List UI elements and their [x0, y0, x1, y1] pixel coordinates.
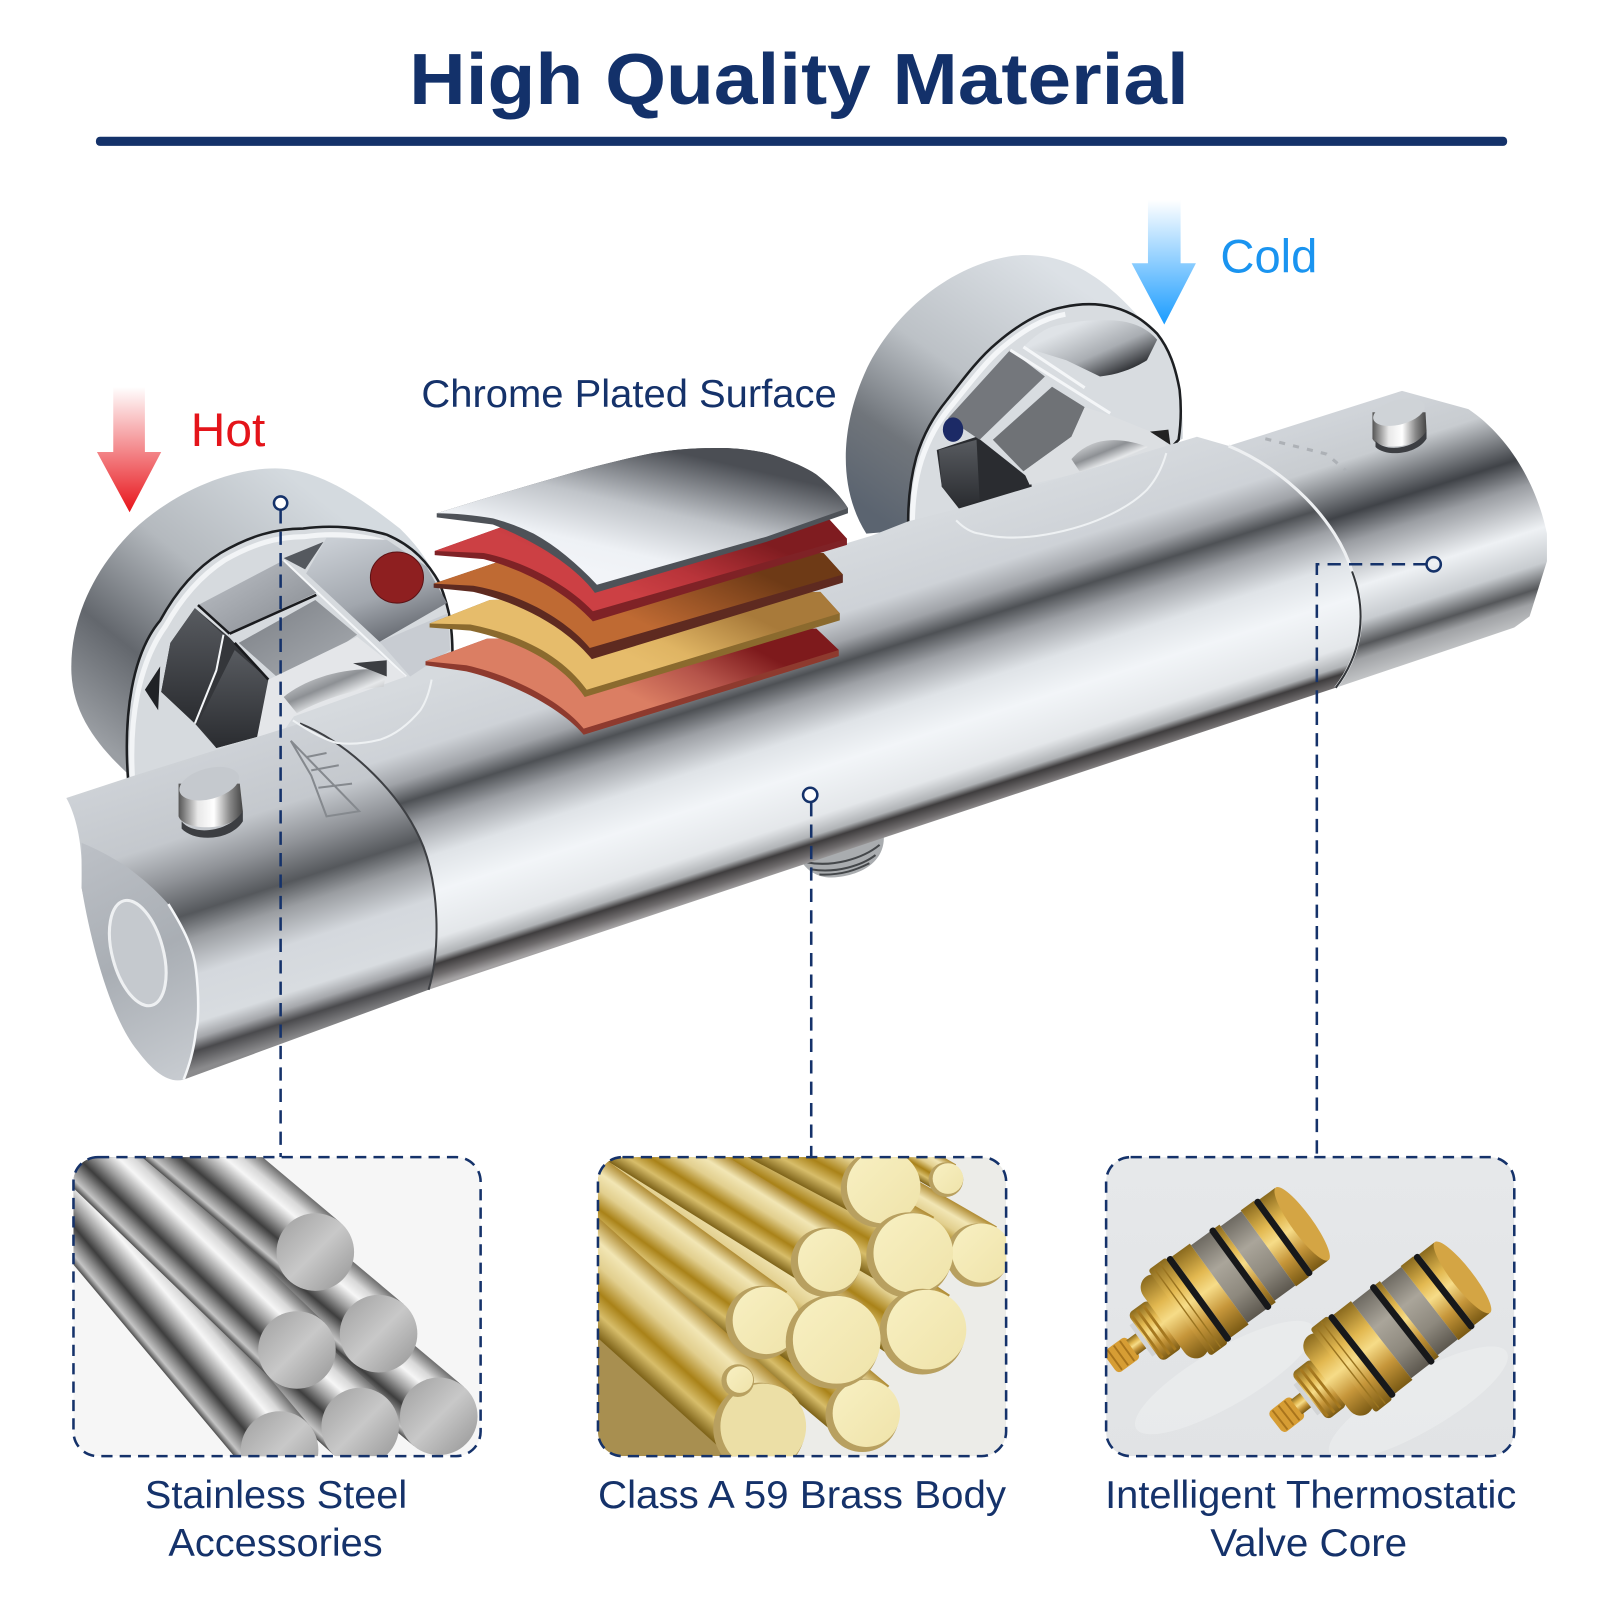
arrow: cold water — [1132, 200, 1196, 324]
panel: thermostatic valve core — [1079, 1157, 1521, 1565]
joint rings — [300, 723, 437, 990]
layer: gold — [430, 592, 840, 697]
left end cap — [66, 723, 437, 1080]
photo: steel rods — [73, 1157, 480, 1456]
title: High Quality Material — [409, 39, 1189, 120]
boss outlines — [956, 453, 1166, 538]
layer: red — [435, 516, 847, 621]
panel: stainless steel — [72, 1156, 482, 1556]
outlet nut under body — [798, 835, 884, 878]
label: hot: Hot — [191, 404, 265, 456]
scale marks — [291, 741, 359, 816]
panel: brass body — [596, 1156, 1008, 1516]
chrome layer stack — [426, 448, 848, 735]
left wall knob — [71, 468, 452, 786]
hex nut, left — [161, 542, 406, 748]
temperature lock button, right — [1370, 394, 1428, 453]
title underline rule — [96, 137, 1507, 146]
caption: intelligent thermostatic: Intelligent Thermostatic — [1105, 1474, 1516, 1517]
red hot indicator — [370, 552, 423, 603]
caption: stainless steel: Stainless Steel — [145, 1474, 407, 1517]
caption: valve core: Valve Core — [1210, 1522, 1407, 1565]
end face — [82, 843, 198, 1080]
right end cap — [1229, 391, 1547, 688]
shower valve body — [66, 391, 1547, 1080]
label: chrome plated surface: Chrome Plated Surface — [421, 373, 837, 416]
right wall knob — [846, 255, 1183, 541]
callout line: thermostatic valve core — [1317, 557, 1441, 1157]
caption: accessories: Accessories — [168, 1522, 383, 1565]
caption: brass body: Class A 59 Brass Body — [598, 1474, 1007, 1517]
centre barrel — [293, 437, 1367, 990]
layer: salmon base — [426, 629, 839, 735]
callout line: stainless steel accessories — [274, 496, 287, 1157]
plate shading, left — [306, 538, 447, 642]
photo: valve cartridges — [1106, 1157, 1514, 1456]
callout line: brass body — [803, 788, 817, 1157]
label: cold: Cold — [1220, 230, 1317, 282]
layer: brown — [434, 553, 843, 659]
hex nut, right — [937, 320, 1170, 510]
temperature lock button, left — [176, 761, 243, 838]
photo: brass rods — [598, 1157, 1006, 1456]
layer: chrome sheet — [437, 448, 848, 593]
arrow: hot water — [97, 387, 161, 512]
